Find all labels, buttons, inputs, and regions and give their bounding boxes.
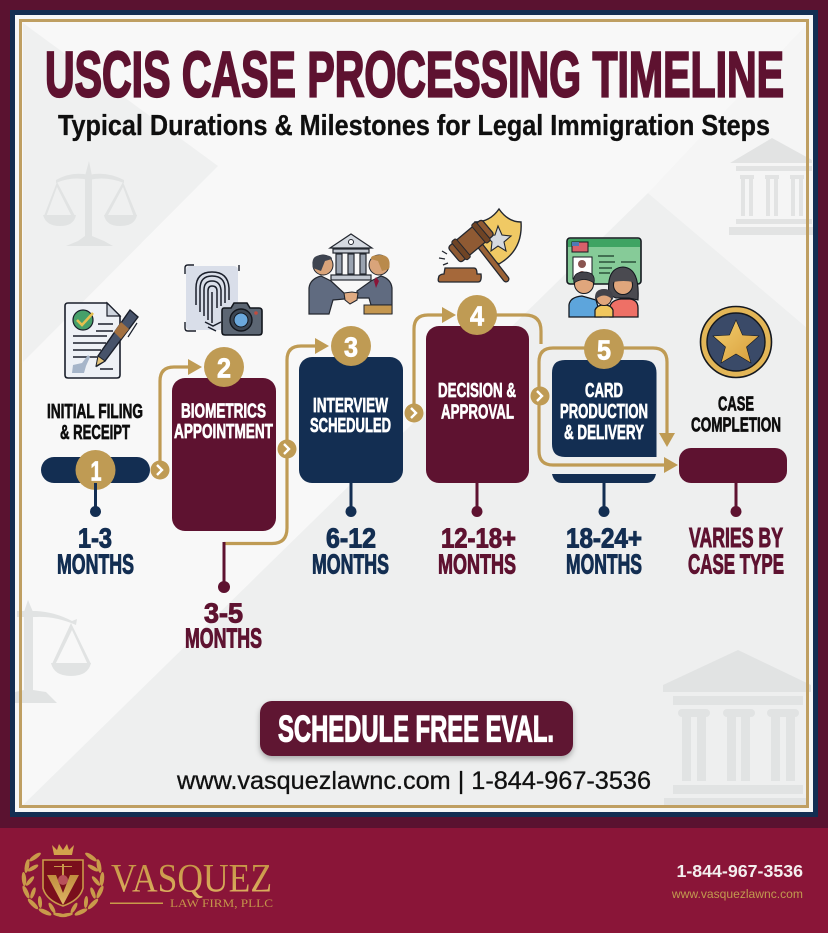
box <box>426 326 529 483</box>
footer website: www.vasquezlawnc.com <box>671 887 803 901</box>
label: decision and approval <box>438 379 516 424</box>
icon: crown <box>52 844 74 855</box>
stem and dot <box>730 483 742 517</box>
connector: step 4 to step 5 and completion <box>530 348 678 473</box>
duration <box>566 522 642 580</box>
icon: handshake before courthouse <box>309 234 392 314</box>
watermark: scales top left <box>43 161 137 246</box>
duration: MONTHS <box>566 548 642 580</box>
label: interview scheduled <box>310 394 391 437</box>
duration: 6-12 <box>326 522 376 554</box>
call to action button <box>260 701 573 756</box>
label: decision and approval: APPROVAL <box>441 400 514 424</box>
duration: 12-18+ <box>441 522 516 554</box>
icon: fingerprint and camera <box>185 265 262 335</box>
badge 2 <box>204 347 244 387</box>
connector: step 1 to step 2 <box>150 359 202 480</box>
footer band <box>0 828 828 933</box>
duration: MONTHS <box>185 622 262 654</box>
footer logo <box>21 844 273 918</box>
box <box>299 357 403 483</box>
label: card production and delivery: CARD <box>585 379 623 402</box>
duration: MONTHS <box>438 548 516 580</box>
duration <box>185 598 262 654</box>
label: card production and delivery <box>560 379 648 444</box>
label: case completion: CASE <box>718 392 754 416</box>
label: biometrics appointment: BIOMETRICS <box>181 400 266 422</box>
box lower sliver <box>552 474 656 483</box>
box <box>172 378 276 531</box>
step 2: biometrics <box>172 265 276 654</box>
pill <box>679 448 787 483</box>
connector: step 3 to step 4 <box>404 307 456 422</box>
icon: laurel wreath right <box>59 851 105 918</box>
icon: shield <box>43 860 83 906</box>
box upper <box>552 360 656 457</box>
badge 5 <box>584 329 624 369</box>
connector: step 2 to step 3 <box>224 338 329 544</box>
badge 5: 5 <box>597 334 611 366</box>
duration: 1-3 <box>78 522 112 554</box>
step 5: card production <box>552 238 656 580</box>
label: initial filing and receipt: INITIAL FILING <box>47 400 143 423</box>
stem and dot <box>90 483 101 517</box>
call to action button: SCHEDULE FREE EVAL. <box>278 708 554 750</box>
icon: laurel wreath left <box>21 851 67 918</box>
stem and dot <box>346 483 356 517</box>
tagline: LAW FIRM, PLLC <box>170 896 273 910</box>
label: decision and approval: DECISION & <box>438 379 516 402</box>
stem and dot <box>218 542 230 593</box>
stem and dot <box>598 483 610 517</box>
case completion <box>679 306 787 580</box>
stem and dot <box>472 483 482 517</box>
rule <box>110 902 163 904</box>
step 1: initial filing <box>41 303 150 580</box>
duration: MONTHS <box>312 548 389 580</box>
step 3: interview <box>299 234 403 580</box>
label: card production and delivery: PRODUCTION <box>560 400 648 423</box>
watermark: temple top right <box>729 138 813 235</box>
label: card production and delivery: & DELIVERY <box>564 421 644 444</box>
wordmark: VASQUEZ <box>111 856 272 900</box>
label: biometrics appointment: APPOINTMENT <box>174 420 273 443</box>
icon: green card and family <box>567 238 641 317</box>
label: interview scheduled: SCHEDULED <box>310 414 391 437</box>
watermark: scales lower left <box>15 600 91 703</box>
footer phone: 1-844-967-3536 <box>676 861 803 881</box>
duration <box>688 522 784 580</box>
step 4: decision <box>426 209 529 580</box>
label: case completion: COMPLETION <box>691 414 781 436</box>
pill <box>41 457 150 483</box>
duration: 3-5 <box>204 598 243 628</box>
label: biometrics appointment <box>174 400 273 443</box>
duration <box>312 522 389 580</box>
duration <box>438 522 516 580</box>
badge 1: 1 <box>90 456 102 486</box>
label: initial filing and receipt: & RECEIPT <box>60 421 130 444</box>
badge 1 <box>76 450 116 490</box>
contact line: www.vasquezlawnc.com | 1-844-967-3536 <box>176 767 651 795</box>
label: case completion <box>691 392 781 436</box>
badge 4: 4 <box>470 300 485 332</box>
badge 3: 3 <box>344 332 358 362</box>
label: interview scheduled: INTERVIEW <box>313 394 388 417</box>
icon: document and pen <box>65 303 138 378</box>
label: initial filing and receipt <box>47 400 143 444</box>
watermark: temple lower right <box>663 650 811 806</box>
connector: step 4 exit <box>490 315 541 344</box>
frame: inner panel <box>22 22 806 805</box>
icon: gavel and shield <box>438 209 521 282</box>
icon: star medallion <box>700 306 772 378</box>
duration <box>57 522 134 580</box>
duration: 18-24+ <box>566 522 642 554</box>
duration: MONTHS <box>57 548 134 580</box>
badge 2: 2 <box>217 352 231 384</box>
badge 4 <box>457 295 497 335</box>
background facets <box>23 23 806 805</box>
badge 3 <box>331 326 371 366</box>
